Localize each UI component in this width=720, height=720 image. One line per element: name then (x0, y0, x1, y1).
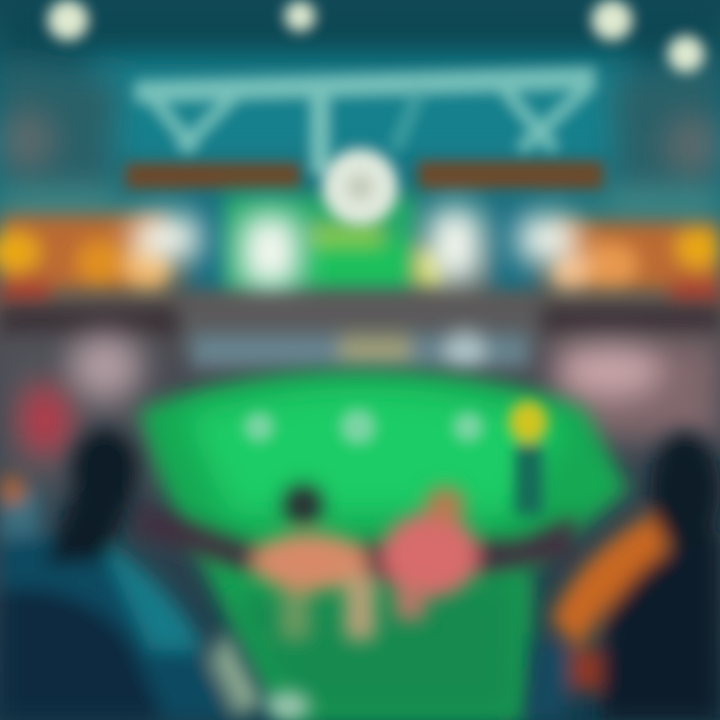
spectator: right foreground (525, 432, 720, 720)
dark band (0, 298, 720, 368)
green field (140, 372, 628, 720)
centre screen (190, 195, 535, 290)
crowd at sides (0, 333, 720, 490)
ceiling trusses (135, 78, 595, 175)
yellow figure (509, 401, 547, 515)
scoreboard bars (125, 161, 603, 189)
ceiling lights (48, 0, 704, 72)
ceiling (0, 0, 720, 220)
hanging lights (132, 208, 578, 288)
wrestlers (135, 485, 575, 640)
spectator: left foreground (0, 428, 310, 720)
field markers (244, 409, 483, 445)
stands: left (0, 215, 172, 304)
stands: right (550, 222, 720, 304)
central clock (322, 149, 398, 225)
